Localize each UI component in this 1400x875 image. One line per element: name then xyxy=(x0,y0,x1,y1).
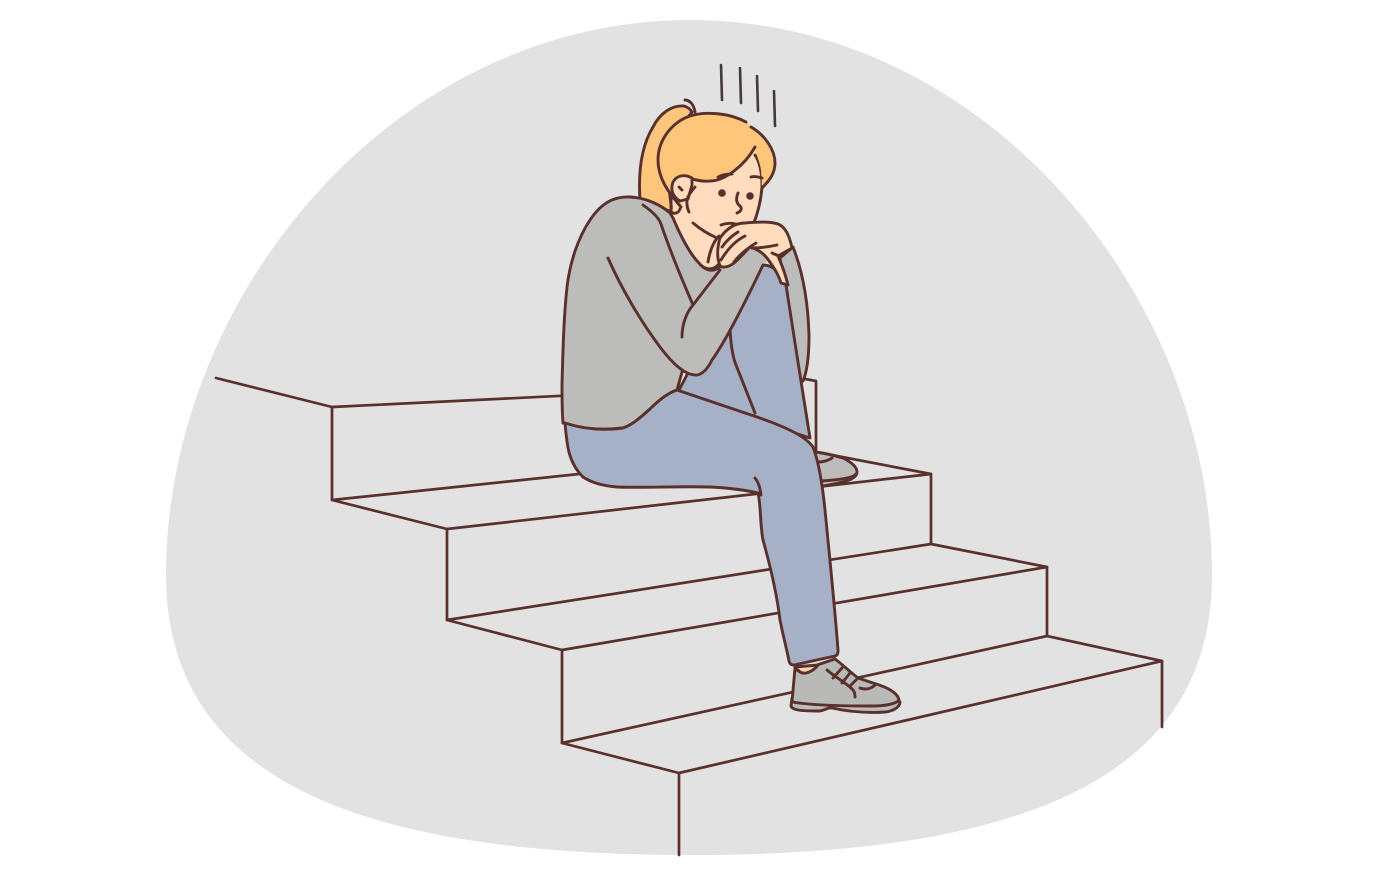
nose xyxy=(737,193,741,213)
ear xyxy=(671,176,695,213)
leg details xyxy=(730,330,755,413)
hands xyxy=(708,222,792,285)
far sleeve xyxy=(780,247,809,381)
upper xyxy=(792,659,899,706)
stress lines above head xyxy=(721,65,775,126)
near arm xyxy=(660,245,769,375)
sweater torso xyxy=(562,197,763,429)
bent leg xyxy=(678,265,810,438)
hair xyxy=(658,113,775,208)
ponytail xyxy=(640,100,695,212)
neck and face xyxy=(672,150,763,271)
eyes xyxy=(718,189,726,197)
laces xyxy=(827,670,855,697)
background blob xyxy=(166,20,1212,855)
front shoe xyxy=(791,659,900,712)
mouth and jaw xyxy=(693,223,742,238)
woman sitting on the stairs xyxy=(562,100,900,712)
sweater folds xyxy=(643,205,693,305)
eyebrows xyxy=(718,174,762,178)
sole xyxy=(791,695,900,712)
back shoe xyxy=(815,452,857,486)
staircase xyxy=(216,378,1162,855)
sock xyxy=(795,665,818,673)
thigh and lower leg xyxy=(565,390,838,665)
